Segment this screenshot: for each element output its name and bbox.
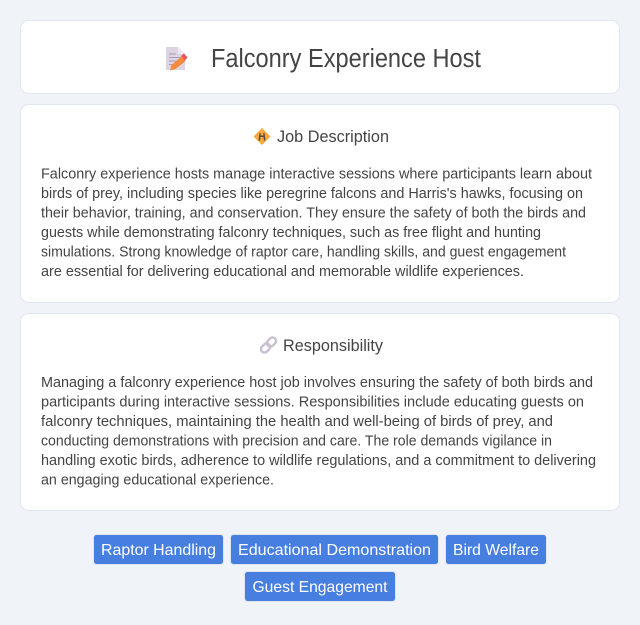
tag: Educational Demonstration xyxy=(230,534,438,564)
text block: responsibility: an engaging educational experience. xyxy=(41,472,274,488)
tag: Educational Demonstration: Educational Demonstration xyxy=(238,542,431,559)
text block: job description: birds of prey, including species like peregrine falcons and Harris's hawks, focusing on xyxy=(41,186,583,202)
panel: responsibility xyxy=(20,314,620,510)
text block: job description xyxy=(41,166,592,280)
heading: responsibility: Responsibility xyxy=(283,337,384,355)
icon: diamond warning sign xyxy=(254,128,270,145)
icon: document with pencil xyxy=(166,47,188,70)
text block: job description: are essential for delivering educational and memorable wildlife experiences. xyxy=(41,264,524,280)
title: Falconry Experience Host xyxy=(211,45,481,73)
text block: responsibility xyxy=(41,375,596,488)
text block: job description: simulations. Strong knowledge of raptor care, handling skills, and guest engagement xyxy=(41,244,566,260)
panel: title card xyxy=(20,20,620,94)
tag: Guest Engagement xyxy=(244,572,396,602)
panel: job description xyxy=(20,104,620,302)
tag: Bird Welfare xyxy=(446,534,546,564)
tag: Guest Engagement: Guest Engagement xyxy=(252,579,388,596)
tag: Raptor Handling: Raptor Handling xyxy=(101,542,216,559)
text block: responsibility: handling exotic birds, adherence to wildlife regulations, and a commitment to delivering xyxy=(41,453,596,469)
tag: Bird Welfare: Bird Welfare xyxy=(453,542,539,559)
tag: Raptor Handling xyxy=(94,534,224,564)
text block: job description: guests while demonstrating falconry techniques, such as free flight and hunting xyxy=(41,225,541,241)
heading: job description: Job Description xyxy=(277,128,389,146)
text block: responsibility: conducting demonstrations with precision and care. The role demands vigilance in xyxy=(41,434,552,450)
text block: job description: their behavior, training, and conservation. They ensure the safety of both the birds and xyxy=(41,206,586,222)
icon: chain link xyxy=(259,336,278,354)
text block: responsibility: participants during interactive sessions. Responsibilities include educating guests on xyxy=(41,394,584,410)
text block: responsibility: falconry techniques, maintaining the health and well-being of birds of prey, and xyxy=(41,414,553,430)
text block: job description: Falconry experience hosts manage interactive sessions where participants learn about xyxy=(41,166,592,182)
text block: responsibility: Managing a falconry experience host job involves ensuring the safety of both birds and xyxy=(41,375,593,391)
